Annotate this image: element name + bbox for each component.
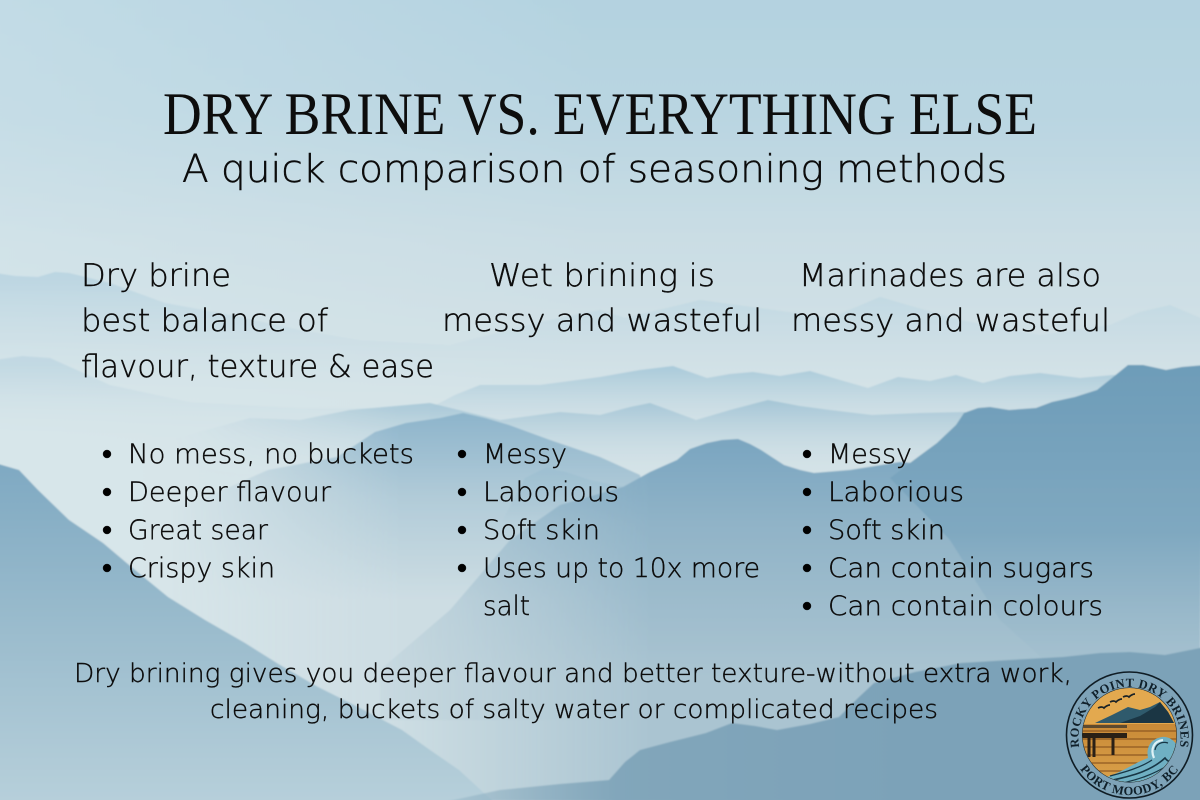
bullet list: dry brine: Great sear — [128, 515, 269, 546]
bullet list: dry brine: Crispy skin — [128, 553, 275, 584]
logo text: bottom arc: PORT MOODY, BC — [1080, 764, 1178, 796]
column heading: dry brine: best balance of — [81, 303, 328, 339]
column heading: dry brine: Dry brine — [81, 258, 231, 294]
bullet list: wet brining: Soft skin — [483, 515, 600, 546]
column heading: marinades: Marinades are also — [799, 258, 1101, 294]
column heading: wet brining: Wet brining is — [489, 258, 715, 294]
icon: three birds — [1098, 694, 1135, 708]
column heading: marinades: messy and wasteful — [791, 303, 1110, 339]
column heading: wet brining — [442, 258, 762, 339]
subtitle: A quick comparison of seasoning methods — [182, 147, 1007, 191]
bullet list: dry brine: Deeper flavour — [128, 477, 332, 508]
bullet list: wet brining — [458, 439, 760, 622]
bullet list: wet brining: Messy — [483, 439, 567, 470]
logo: Rocky Point Dry Brines badge — [1066, 671, 1194, 799]
title: DRY BRINE VS. EVERYTHING ELSE — [163, 81, 1037, 147]
column heading: dry brine — [81, 258, 434, 385]
bullet list: marinades: Can contain colours — [828, 591, 1103, 622]
bullet list: marinades: Messy — [828, 439, 912, 470]
bullet list: marinades: Laborious — [828, 477, 964, 508]
closing statement — [74, 659, 1072, 725]
bullet list: marinades: Can contain sugars — [828, 553, 1094, 584]
bullet list: wet brining: Uses up to 10x more — [483, 553, 760, 584]
column heading: marinades — [791, 258, 1110, 339]
column heading: wet brining: messy and wasteful — [442, 303, 762, 339]
bullet list: wet brining: Laborious — [483, 477, 619, 508]
logo text: top arc: ROCKY POINT DRY BRINES — [1070, 678, 1189, 748]
bullet list: dry brine: No mess, no buckets — [128, 439, 414, 470]
bullet list: marinades — [803, 439, 1103, 622]
bullet list: wet brining: salt — [483, 591, 530, 622]
closing statement: cleaning, buckets of salty water or complicated recipes — [210, 695, 938, 725]
bullet list: marinades: Soft skin — [828, 515, 945, 546]
column heading: dry brine: flavour, texture & ease — [81, 349, 434, 385]
logo scene: sunset, mountain, pier and wave — [1082, 688, 1176, 782]
bullet list: dry brine — [103, 439, 414, 584]
closing statement: Dry brining gives you deeper flavour and better texture-without extra work, — [74, 659, 1072, 689]
